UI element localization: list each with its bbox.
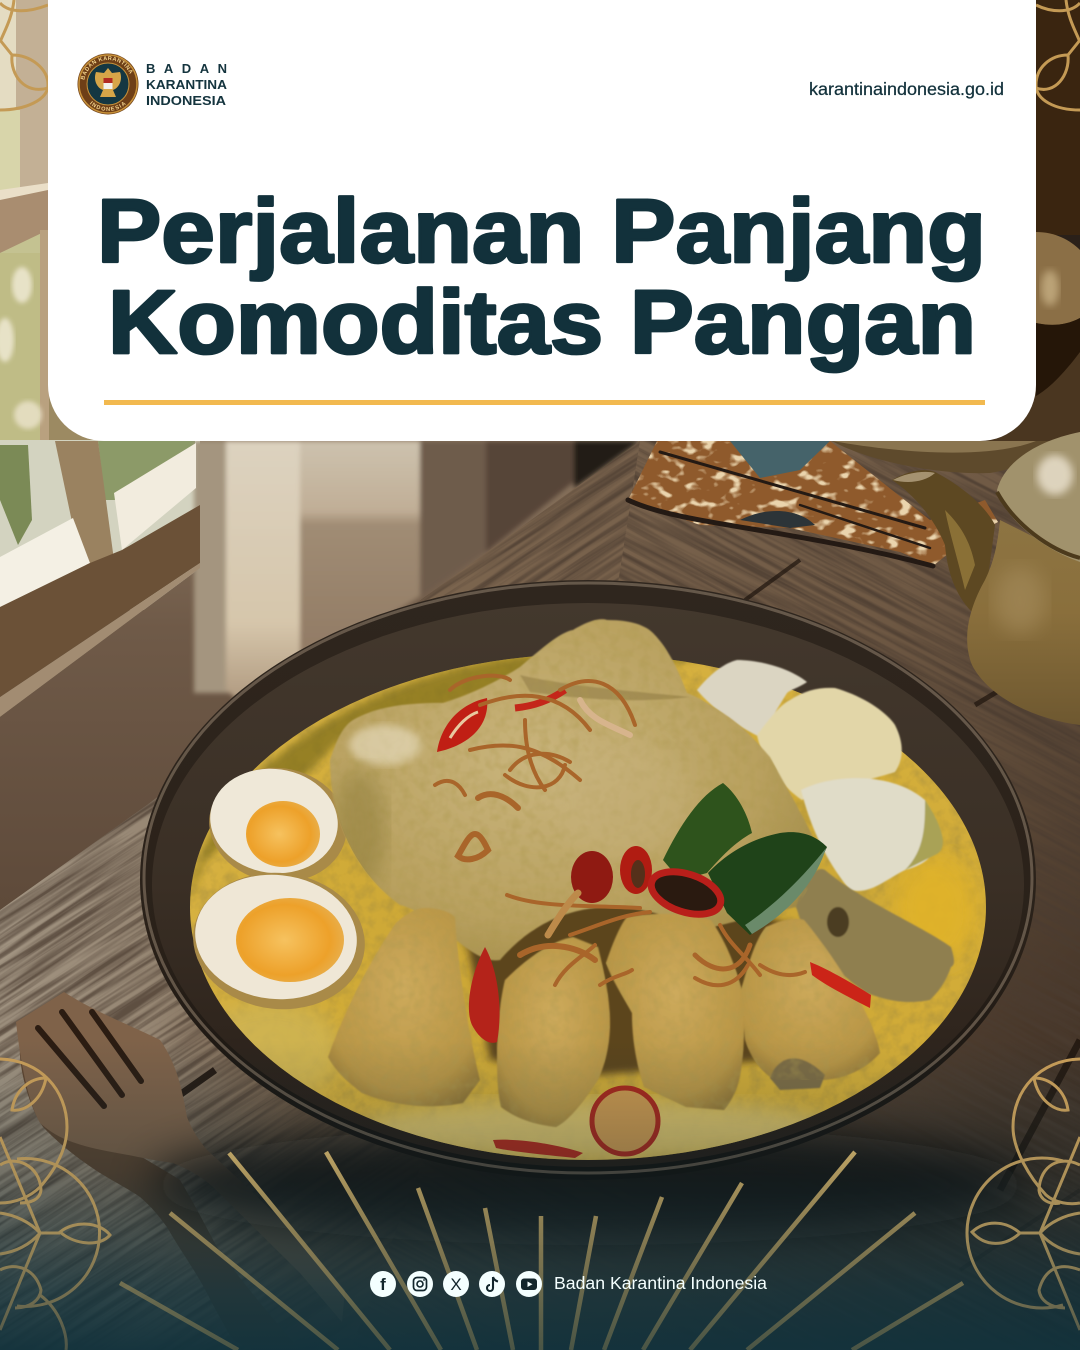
card background — [48, 0, 1036, 441]
egg upper — [202, 759, 354, 891]
back wall — [0, 441, 640, 910]
wood grain left — [0, 441, 640, 1350]
boiled eggs — [186, 759, 372, 1018]
footer account name: Badan Karantina Indonesia — [554, 1273, 767, 1293]
ornament: bottom left — [0, 1059, 110, 1350]
logo — [78, 54, 228, 114]
dark gaps between chicken pieces — [465, 899, 790, 1075]
right corner bowls and tray — [832, 0, 1080, 473]
window background greenery — [0, 0, 200, 610]
table top — [0, 441, 1080, 1350]
icon: x — [443, 1271, 469, 1297]
logo wordmark — [146, 61, 228, 108]
lid — [997, 432, 1080, 562]
icon: youtube — [516, 1271, 542, 1297]
logo emblem: INDONESIA — [90, 101, 126, 111]
ornament: top left — [0, 0, 48, 110]
mushroom piece — [770, 1058, 825, 1090]
wooden fork and spoon — [16, 992, 345, 1350]
sauce texture — [190, 650, 986, 1160]
title — [97, 182, 986, 373]
logo wordmark: KARANTINA — [146, 77, 228, 92]
drumstick — [796, 869, 954, 1002]
wood grain right — [350, 441, 1080, 1350]
icon: instagram — [407, 1271, 433, 1297]
batik cloth — [628, 441, 1000, 576]
chilli shred — [515, 690, 565, 708]
bowl rim highlight — [144, 583, 1032, 1173]
body — [967, 520, 1080, 725]
plank gaps — [130, 560, 1080, 1270]
dark bottom gradient — [0, 1040, 1080, 1350]
lontong rice cakes — [697, 660, 943, 891]
chicken piece centre — [497, 937, 610, 1127]
bowl shadow — [150, 1125, 1030, 1245]
logo wordmark: INDONESIA — [146, 93, 227, 108]
ornament: top right — [1036, 0, 1080, 110]
red chilli slices — [437, 690, 871, 1158]
icon: facebook — [370, 1271, 396, 1297]
egg lower — [186, 864, 372, 1018]
chilli centre — [571, 851, 613, 903]
logo emblem: BADAN KARANTINA — [80, 56, 132, 80]
chicken piece right — [606, 914, 744, 1110]
chicken thigh — [330, 619, 815, 960]
chilli middle — [620, 846, 652, 894]
chilli top — [437, 698, 487, 752]
bowl inner wall — [152, 603, 1024, 1167]
icon: facebook: f — [380, 1275, 386, 1294]
website url: karantinaindonesia.go.id — [809, 79, 1004, 99]
header card — [48, 0, 1036, 441]
title underline — [104, 400, 985, 405]
icon: tiktok — [479, 1271, 505, 1297]
brass teapot — [892, 432, 1080, 725]
title: Perjalanan Panjang — [97, 182, 986, 282]
curry sauce — [190, 654, 986, 1160]
chicken piece left — [328, 908, 480, 1106]
footer social row — [370, 1271, 767, 1297]
curtain panels — [194, 441, 640, 700]
bowl — [140, 580, 1036, 1180]
braised chicken pieces — [328, 619, 954, 1127]
logo emblem — [78, 54, 138, 114]
chicken skin texture and highlight — [332, 636, 866, 1108]
bowl outer — [140, 580, 1036, 1180]
upper fold shadow — [520, 675, 690, 700]
spout — [892, 470, 995, 612]
title: Komoditas Pangan — [108, 273, 976, 373]
logo wordmark: BADAN — [146, 61, 227, 76]
gold radiating rays — [120, 1152, 963, 1350]
chilli right — [810, 962, 871, 1008]
chilli ring — [646, 864, 726, 922]
chilli lower — [493, 1140, 583, 1158]
icon: x: X — [450, 1275, 462, 1294]
chilli slice bottom — [592, 1088, 658, 1154]
chilli long — [469, 947, 500, 1043]
fork — [16, 992, 345, 1322]
kaffir lime leaves — [663, 783, 827, 935]
ornament: bottom right — [967, 1059, 1080, 1330]
spoon — [20, 1043, 300, 1350]
fork slots — [38, 1012, 141, 1106]
window frame and sills — [0, 441, 200, 717]
table left lighter area — [0, 690, 300, 1350]
chicken piece far right — [741, 919, 880, 1080]
fried shallots topping — [435, 676, 805, 985]
